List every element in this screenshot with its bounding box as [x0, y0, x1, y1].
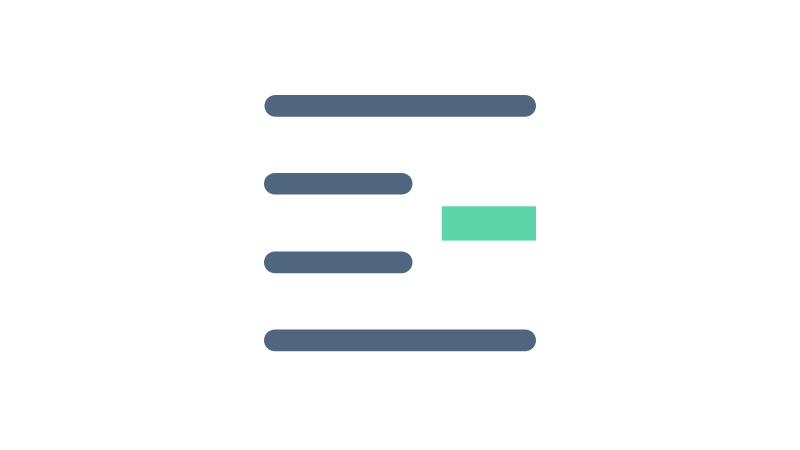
second short bar: [264, 173, 412, 194]
bottom long bar: [264, 330, 536, 351]
green rectangle: [442, 206, 536, 241]
third short bar: [264, 252, 412, 273]
top long bar: [264, 95, 536, 117]
